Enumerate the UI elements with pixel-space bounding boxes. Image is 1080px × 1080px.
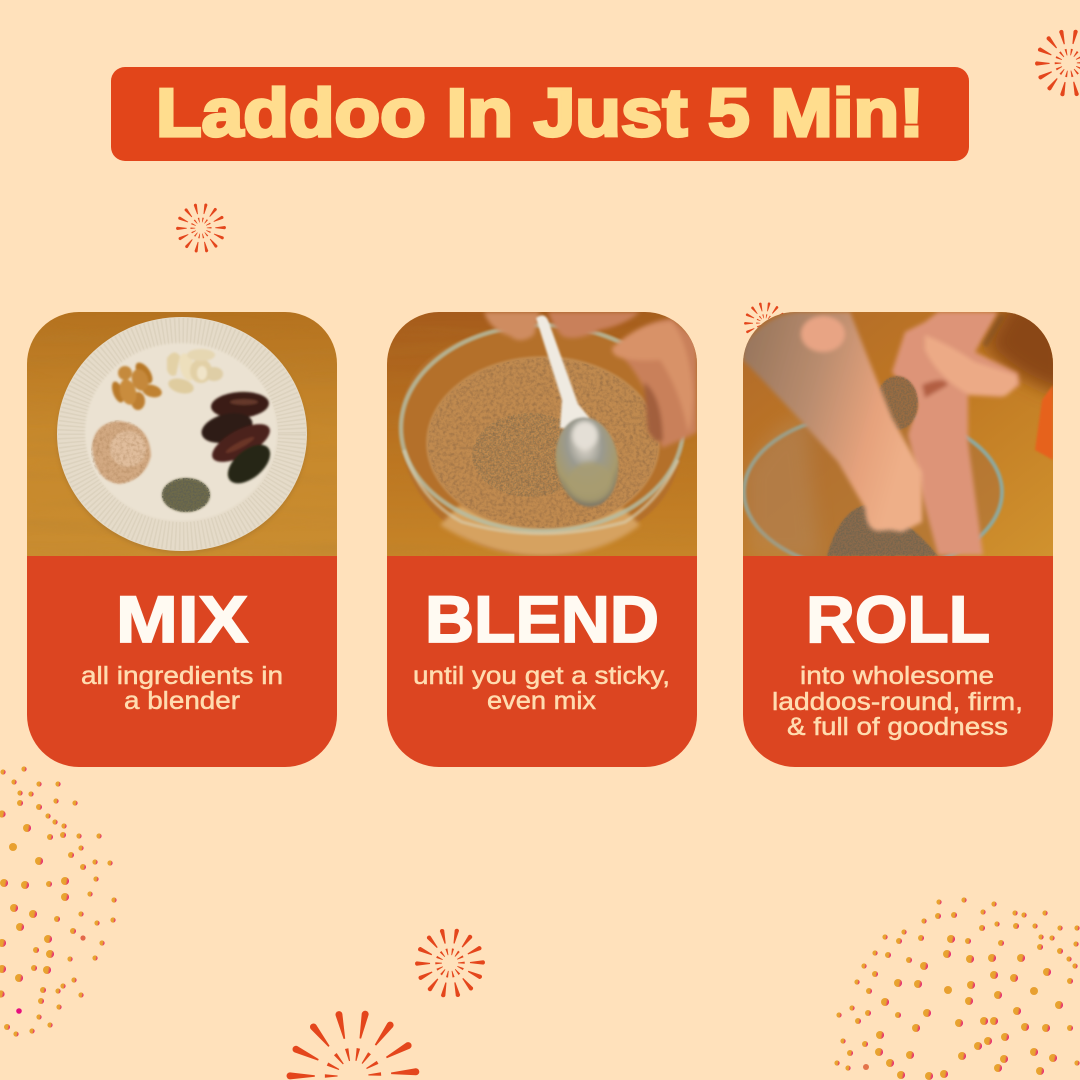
heading: roll: ROLL	[806, 582, 990, 656]
photo: hands rolling laddoo	[743, 312, 1053, 556]
text: roll description: laddoos-round, firm,	[772, 688, 1023, 716]
text: roll description	[772, 662, 1023, 741]
text: blend description	[413, 662, 670, 715]
label panel: roll	[743, 556, 1053, 767]
photo: plate of ingredients	[27, 312, 337, 556]
title banner	[111, 67, 969, 161]
panel: blend	[387, 312, 697, 767]
label panel: blend	[387, 556, 697, 767]
heading: blend: BLEND	[425, 582, 659, 656]
decorative dots: bottom right	[834, 897, 1080, 1080]
icon: firework top right	[1035, 29, 1080, 97]
panel: roll	[743, 300, 1070, 767]
icon: firework upper left	[176, 203, 226, 253]
label panel: mix	[27, 556, 337, 767]
title: Laddoo In Just 5 Min!	[156, 75, 924, 151]
panel: mix	[27, 312, 337, 767]
text: roll description: & full of goodness	[787, 713, 1008, 741]
text: mix description: all ingredients in	[81, 662, 283, 690]
heading: mix: MIX	[116, 582, 248, 656]
icon: firework bottom edge	[287, 1010, 420, 1079]
icon: firework bottom centre	[415, 928, 485, 998]
text: blend description: until you get a sticky,	[413, 662, 670, 690]
text: roll description: into wholesome	[800, 662, 994, 690]
photo: bowl with spoon	[387, 312, 697, 556]
icon: firework behind third card	[744, 302, 786, 344]
text: mix description: a blender	[124, 687, 240, 715]
decorative dots: left	[0, 766, 117, 1037]
text: blend description: even mix	[487, 687, 597, 715]
text: mix description	[81, 662, 283, 715]
